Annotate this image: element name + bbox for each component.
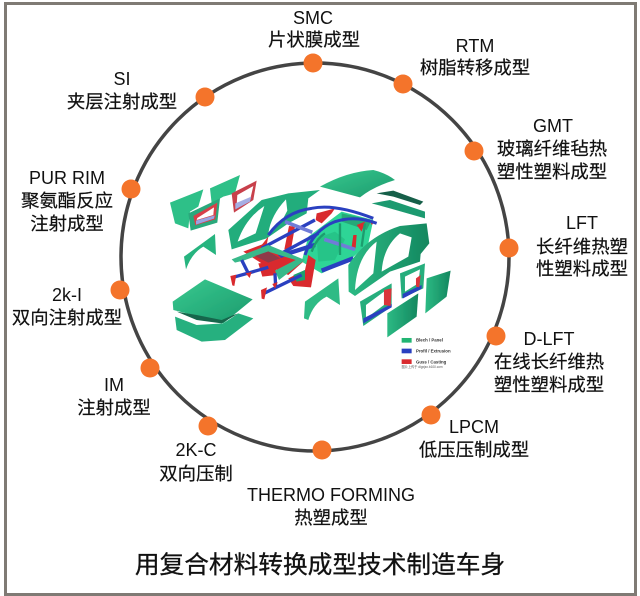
label: D-LFT: 塑性塑料成型: [494, 374, 604, 395]
label: SMC: [268, 8, 360, 50]
roof panel: [320, 170, 395, 197]
label: 2K-C: 2K-C: [175, 440, 217, 460]
label: LFT: 性塑料成型: [536, 258, 628, 279]
label: LFT: LFT: [566, 213, 598, 233]
label: THERMO FORMING: 热塑成型: [294, 507, 368, 528]
label: D-LFT: 在线长纤维热: [494, 351, 604, 372]
label: LPCM: [419, 417, 529, 460]
label: SMC: SMC: [293, 8, 333, 28]
red reinforcements: [262, 208, 375, 249]
label: 2k-I: 双向注射成型: [12, 307, 122, 328]
label: 2k-I: 2k-I: [52, 285, 82, 305]
label: SI: SI: [113, 69, 131, 89]
label: THERMO FORMING: THERMO FORMING: [247, 485, 415, 505]
label: LPCM: LPCM: [449, 417, 499, 437]
node markers: [110, 54, 518, 460]
label: 2K-C: 双向压制: [159, 463, 233, 484]
label: PUR RIM: [21, 168, 113, 234]
exploded car body diagram: [170, 170, 451, 369]
green front panel: [232, 245, 305, 280]
label: PUR RIM: 聚氨酯反应: [21, 190, 113, 211]
label: LPCM: 低压压制成型: [419, 439, 529, 460]
centre structure: [228, 190, 377, 299]
legend: Guss / Casting: [416, 359, 447, 364]
label: THERMO FORMING: [247, 485, 415, 528]
near front fender: [304, 278, 340, 320]
interior floor: [302, 212, 373, 273]
label: SMC: 片状膜成型: [268, 29, 360, 50]
far door frames: [188, 198, 220, 231]
far side frame: [228, 190, 320, 249]
label: GMT: [497, 116, 607, 182]
label: GMT: 玻璃纤维毡热: [497, 138, 607, 159]
legend: 图片上传于 dlgxjsx.b100.com: [402, 364, 443, 369]
label: IM: IM: [104, 375, 124, 395]
front rails: [233, 260, 302, 293]
label: IM: [77, 375, 151, 418]
legend: [402, 338, 451, 369]
green pillars: [312, 223, 365, 255]
label: RTM: RTM: [456, 36, 494, 56]
label: 2k-I: [12, 285, 122, 328]
label: RTM: [420, 36, 530, 78]
label: LFT: [536, 213, 628, 279]
legend: Blech / Panel: [416, 338, 443, 343]
far rear doors: [170, 189, 203, 228]
far front fender: [184, 234, 216, 269]
near door frames: [360, 283, 392, 326]
label: D-LFT: D-LFT: [524, 329, 574, 349]
label: GMT: GMT: [533, 116, 573, 136]
legend: Profil / Extrusion: [416, 348, 451, 353]
label: PUR RIM: 注射成型: [30, 213, 104, 234]
near side frame: [348, 223, 429, 296]
front bumper assembly: [175, 313, 253, 342]
label: SI: [67, 69, 177, 112]
label: IM: 注射成型: [77, 397, 151, 418]
near doors: [387, 293, 418, 337]
rear deck parts: [377, 191, 423, 205]
hood: [173, 279, 253, 323]
title: 用复合材料转换成型技术制造车身: [135, 551, 505, 579]
label: D-LFT: [494, 329, 604, 395]
label: PUR RIM: PUR RIM: [29, 168, 105, 188]
ring: [121, 63, 509, 451]
blue roof rails: [268, 207, 377, 255]
label: SI: 夹层注射成型: [67, 91, 177, 112]
label: RTM: 树脂转移成型: [420, 57, 530, 78]
label: GMT: 塑性塑料成型: [497, 161, 607, 182]
label: LFT: 长纤维热塑: [536, 236, 628, 257]
label: 2K-C: [159, 440, 233, 484]
